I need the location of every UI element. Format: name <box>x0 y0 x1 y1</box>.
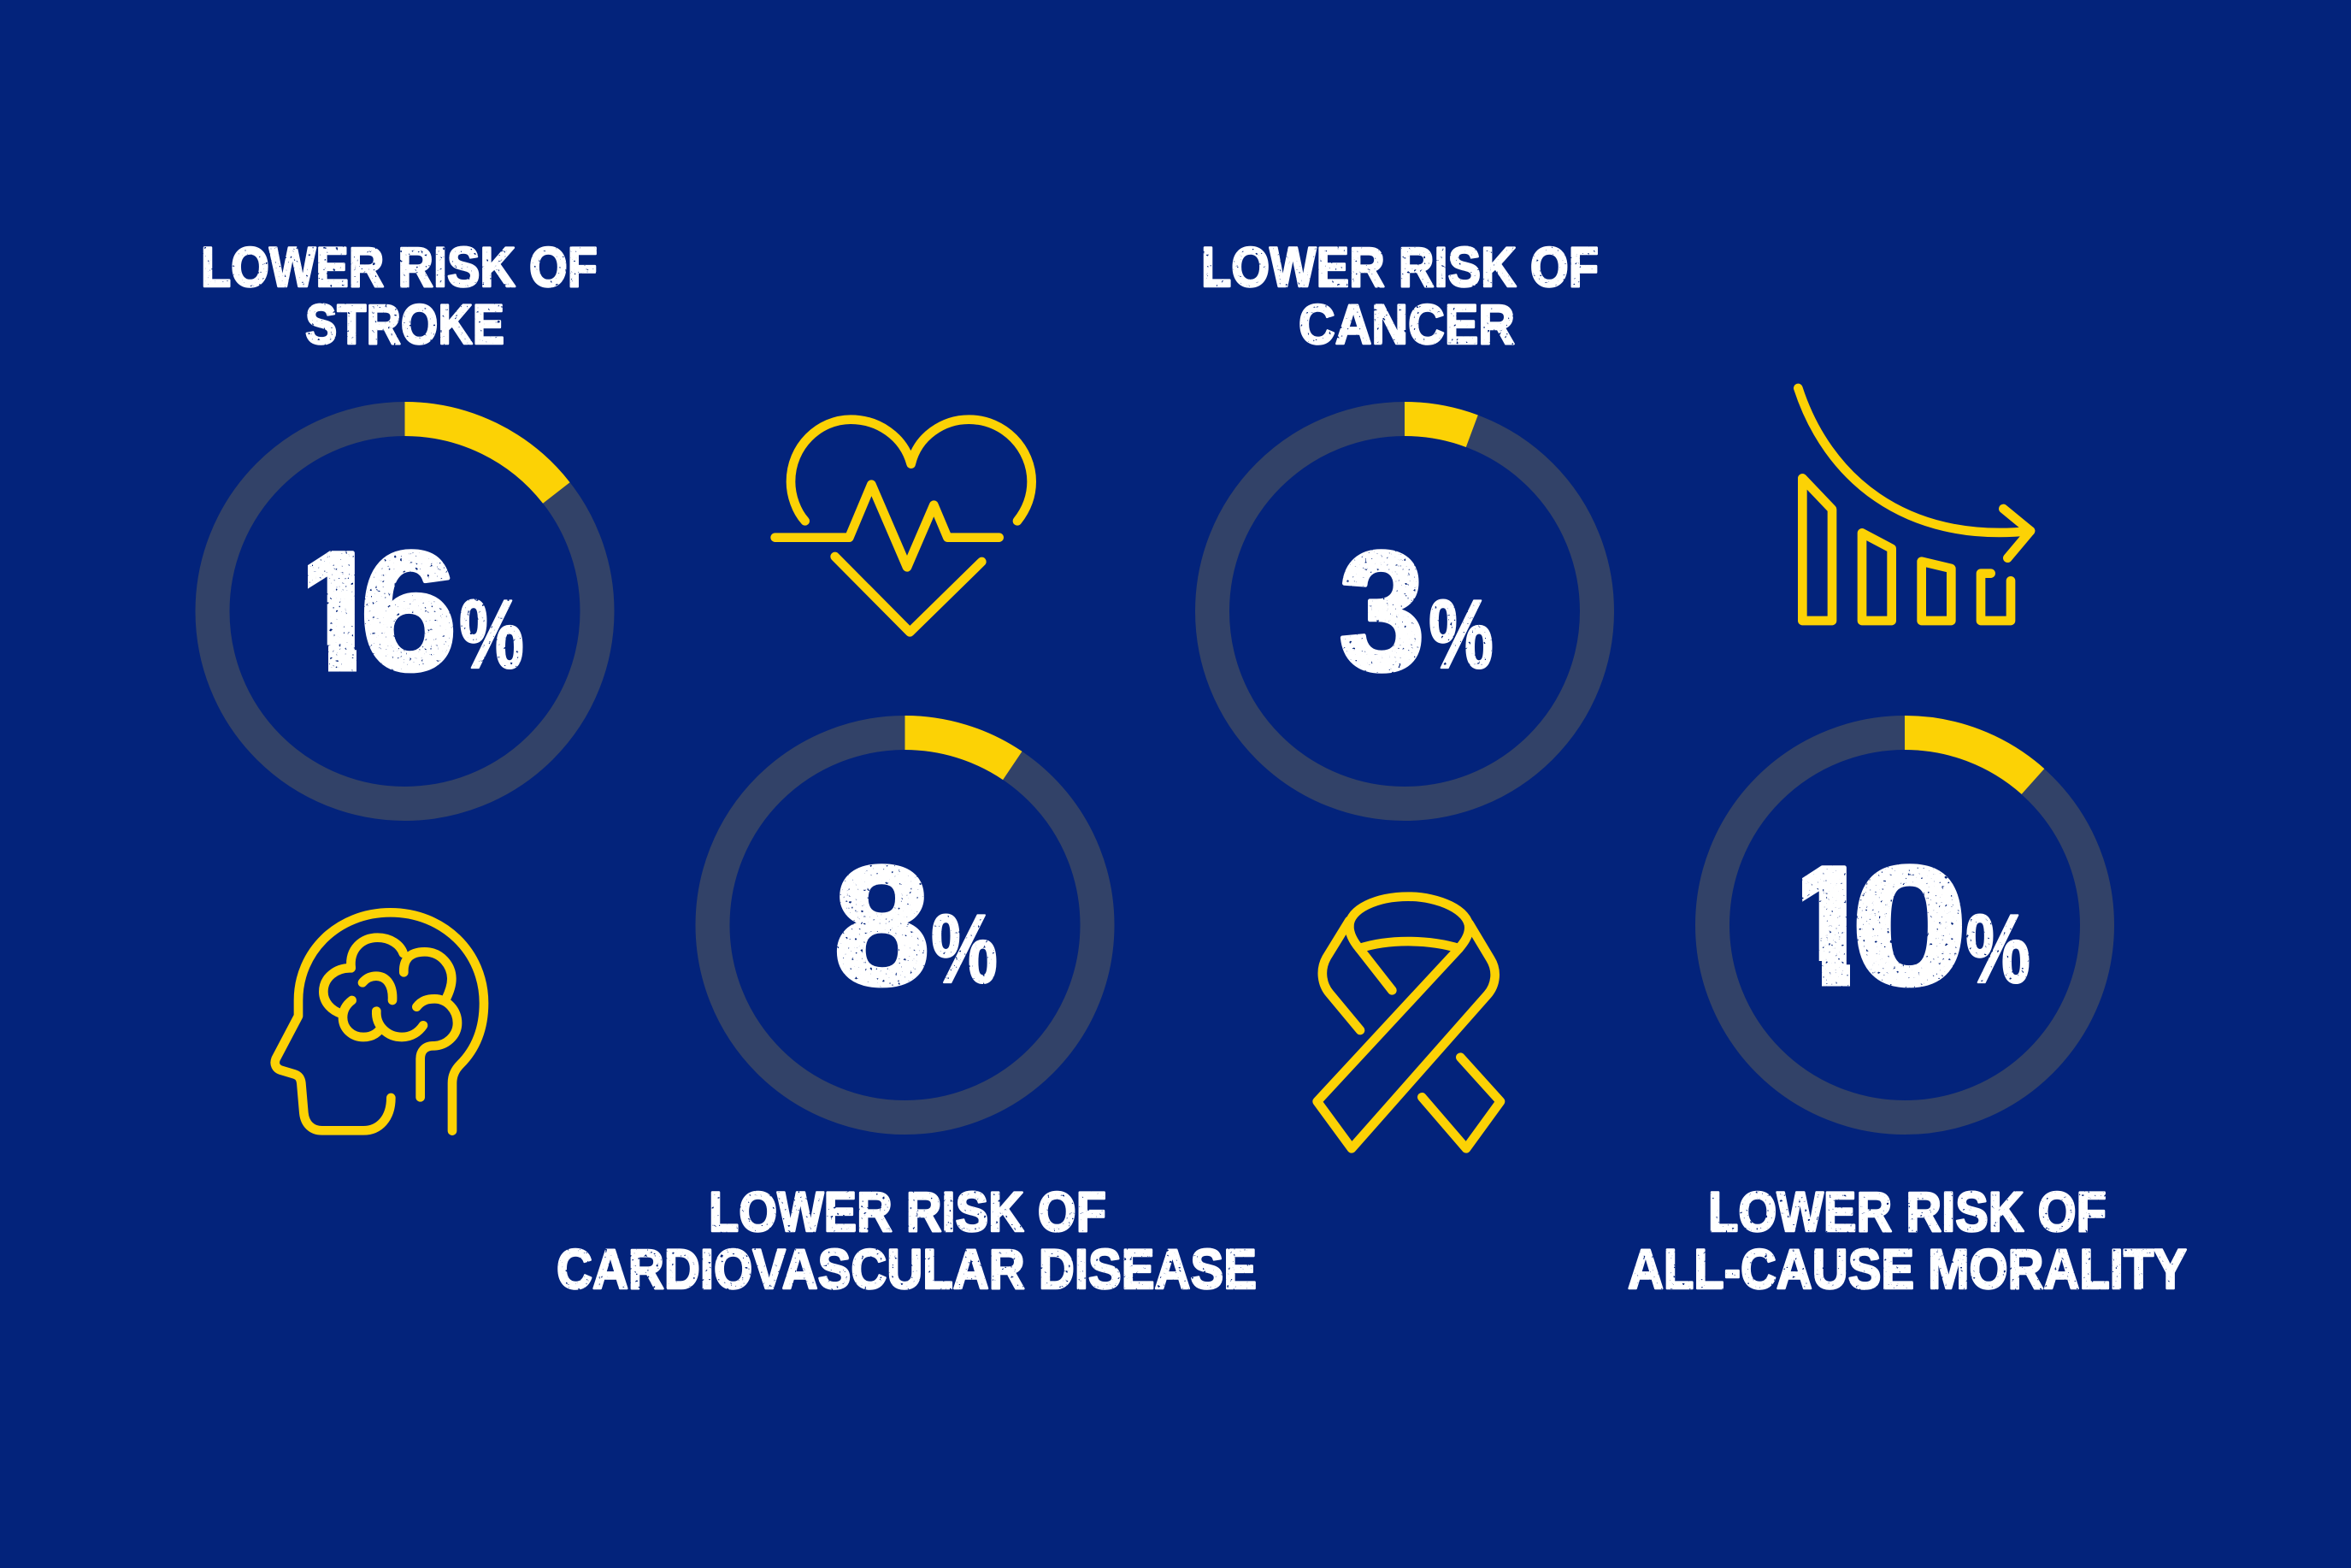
heading: lower risk of stroke: STROKE <box>305 292 504 356</box>
heading: lower risk of all-cause morality: LOWER RISK OF <box>1708 1180 2106 1243</box>
value: 16%: 6 <box>360 516 457 705</box>
panel: all-cause mortality statistic <box>1628 733 2187 1300</box>
heading: lower risk of cardiovascular disease <box>557 1180 1257 1300</box>
value: 3%: 3 <box>1339 516 1425 705</box>
panel: cancer statistic <box>1201 235 1599 804</box>
value: 16%: 1 <box>290 516 384 705</box>
panel: stroke statistic <box>201 235 598 804</box>
heading: lower risk of all-cause morality: ALL-CAUSE MORALITY <box>1628 1237 2187 1300</box>
value: 8% <box>834 831 998 1020</box>
icon: declining bar chart with arrow <box>1798 388 2030 621</box>
value: 8%: % <box>931 895 998 1004</box>
heading: lower risk of cardiovascular disease: CARDIOVASCULAR DISEASE <box>557 1237 1257 1300</box>
heading: lower risk of cancer: CANCER <box>1299 292 1515 356</box>
value: 8%: 8 <box>834 831 930 1020</box>
donut chart: 16% <box>212 419 597 804</box>
heading: lower risk of stroke: LOWER RISK OF <box>201 235 598 298</box>
icon: awareness ribbon <box>1317 897 1500 1148</box>
panel: cardiovascular disease statistic <box>557 733 1257 1300</box>
heading: lower risk of cancer <box>1201 235 1599 356</box>
value: 10%: 0 <box>1851 831 1968 1020</box>
heading: lower risk of cardiovascular disease: LOWER RISK OF <box>709 1180 1106 1243</box>
value: 16% <box>308 549 523 674</box>
value: 10%: % <box>1965 895 2030 1004</box>
icon: head with brain <box>275 912 484 1131</box>
value: 3%: % <box>1429 581 1494 689</box>
value: 3% <box>1339 516 1494 705</box>
infographic canvas <box>195 246 2187 1290</box>
heading: lower risk of cancer: LOWER RISK OF <box>1201 235 1599 298</box>
heading: lower risk of stroke <box>201 235 598 356</box>
value: 16%: % <box>459 581 524 689</box>
icon: heart with pulse <box>775 420 1032 632</box>
donut chart: 8% <box>713 733 1098 1117</box>
donut chart: 10% <box>1712 733 2097 1117</box>
value: 10%: 1 <box>1782 831 1876 1020</box>
value: 10% <box>1802 864 2030 988</box>
donut chart: 3% <box>1212 419 1597 804</box>
heading: lower risk of all-cause morality <box>1628 1180 2187 1300</box>
